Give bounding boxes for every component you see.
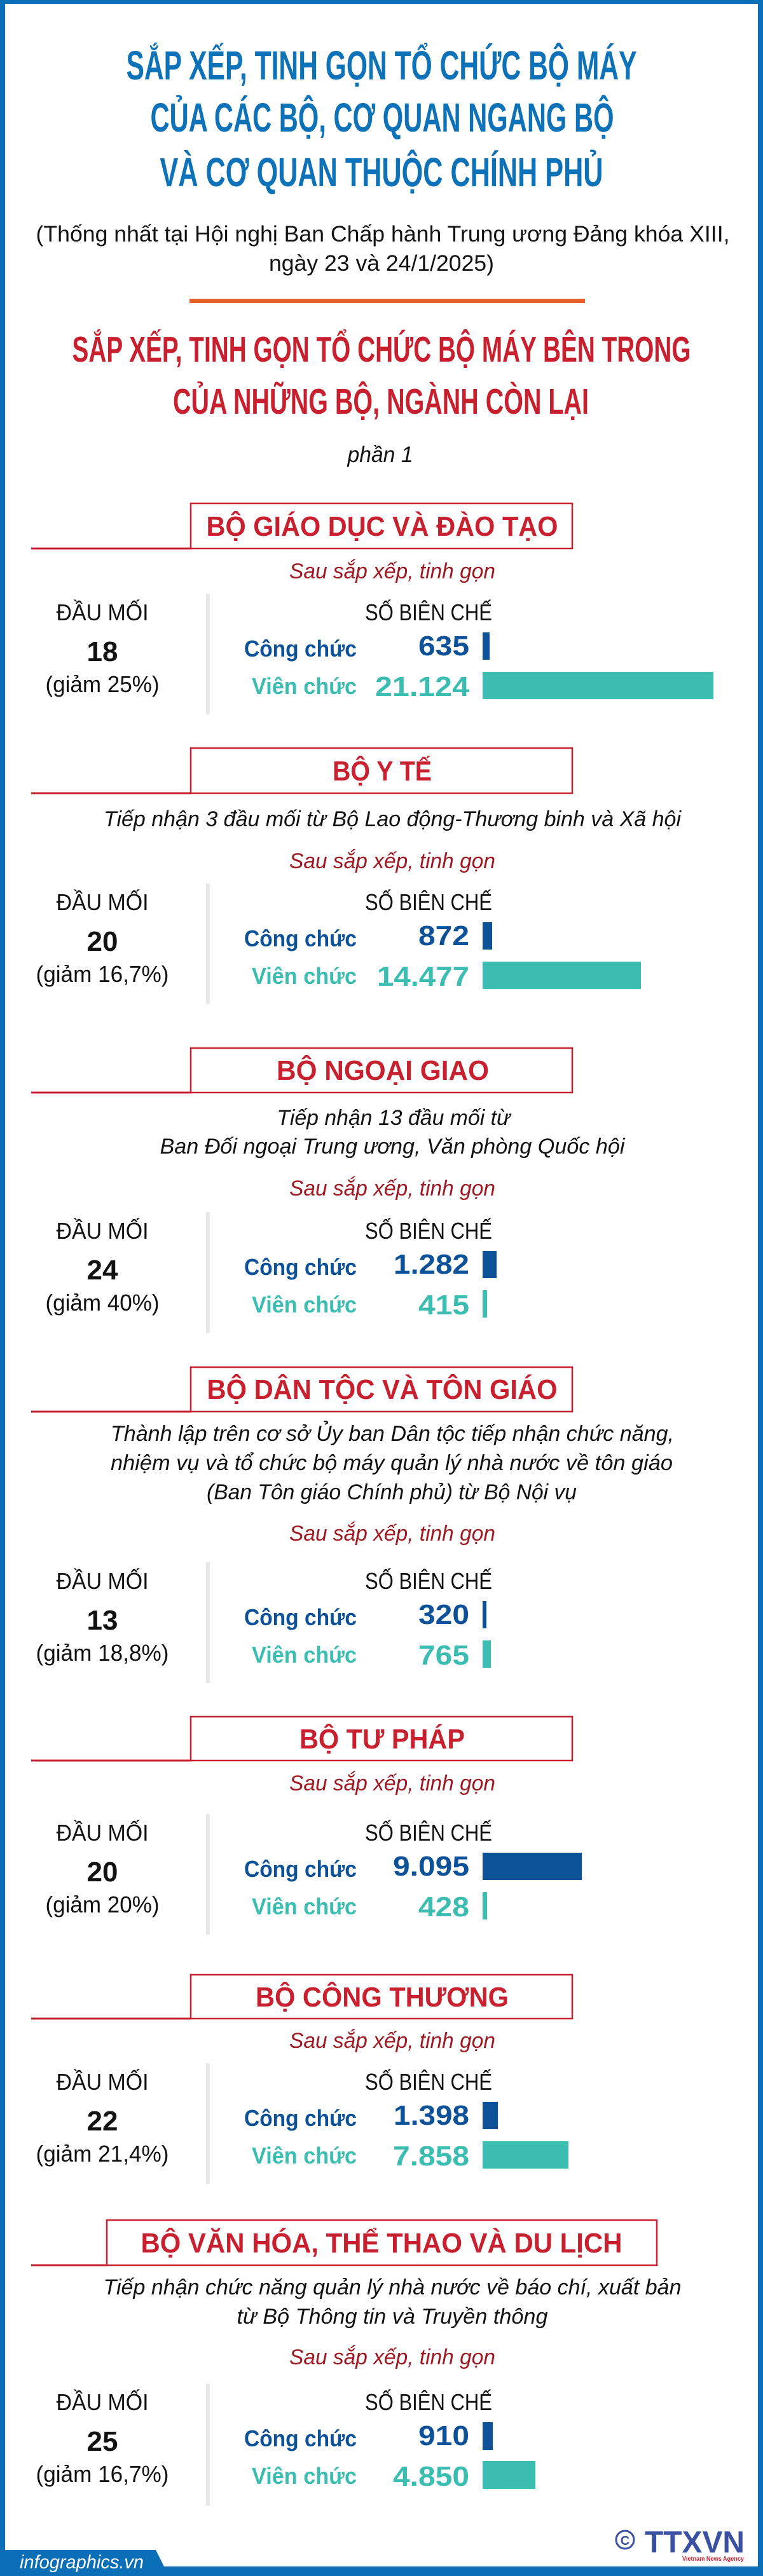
heading box: BỘ CÔNG THƯƠNG xyxy=(256,1980,509,2013)
red section title xyxy=(72,329,691,422)
đầu mối: (giảm 16,7%) xyxy=(36,2461,169,2487)
panel: Bộ Ngoại giao xyxy=(31,1048,626,1333)
bar chart: biên chế: 21.124 xyxy=(375,671,470,702)
bar chart: biên chế: Viên chức xyxy=(252,1291,357,1318)
panel: Bộ Công Thương: Sau sắp xếp, tinh gọn xyxy=(289,2029,495,2053)
đầu mối: ĐẦU MỐI xyxy=(56,1567,149,1594)
panel: Bộ Ngoại giao: Sau sắp xếp, tinh gọn xyxy=(289,1176,495,1201)
bar chart: biên chế: Viên chức xyxy=(252,963,357,989)
bar chart: biên chế: 4.850 xyxy=(393,2461,469,2492)
đầu mối: (giảm 25%) xyxy=(46,671,159,697)
bar chart: biên chế: Viên chức xyxy=(252,2463,357,2489)
bar chart: biên chế: SỐ BIÊN CHẾ xyxy=(365,1567,492,1594)
heading box: BỘ DÂN TỘC VÀ TÔN GIÁO xyxy=(207,1373,557,1405)
bar chart: biên chế: 1.282 xyxy=(394,1249,469,1280)
đầu mối xyxy=(36,1567,169,1666)
đầu mối: (giảm 40%) xyxy=(46,1290,159,1316)
bar chart: biên chế: 428 xyxy=(418,1891,469,1923)
main title xyxy=(126,42,637,195)
bar chart: biên chế: 872 xyxy=(418,920,469,951)
footer band xyxy=(0,2550,763,2576)
panel: Bộ Văn hóa, Thể thao và Du lịch xyxy=(31,2220,682,2505)
bar chart: biên chế: SỐ BIÊN CHẾ xyxy=(365,2389,492,2415)
bar chart: biên chế: Công chức xyxy=(244,1604,357,1630)
panel: Bộ Văn hóa, Thể thao và Du lịch: Sau sắp xếp, tinh gọn xyxy=(289,2345,495,2369)
panel: Bộ Y tế xyxy=(31,748,682,1004)
bar chart: biên chế xyxy=(244,599,713,702)
icon: TTXVN logo: C xyxy=(621,2534,629,2548)
heading box xyxy=(31,1975,572,2020)
panel: Bộ Văn hóa, Thể thao và Du lịch: Tiếp nhận chức năng quản lý nhà nước về báo chí, xuất bản xyxy=(103,2275,682,2300)
panel: Bộ Tư pháp xyxy=(31,1717,582,1935)
đầu mối: 22 xyxy=(87,2106,118,2137)
đầu mối xyxy=(46,1217,159,1316)
đầu mối: ĐẦU MỐI xyxy=(56,889,149,915)
bar chart: biên chế: 765 xyxy=(418,1640,469,1671)
subtitle xyxy=(36,222,730,276)
panel: Bộ Dân tộc và Tôn giáo: (Ban Tôn giáo Chính phủ) từ Bộ Nội vụ xyxy=(207,1480,577,1504)
bar chart: biên chế: Công chức xyxy=(244,2425,357,2451)
bar chart: biên chế: Công chức xyxy=(244,1254,357,1280)
panel: Bộ Văn hóa, Thể thao và Du lịch: từ Bộ Thông tin và Truyền thông xyxy=(237,2305,548,2329)
bar chart: biên chế: 9.095 xyxy=(393,1851,469,1882)
icon: TTXVN logo: Vietnam News Agency xyxy=(682,2556,744,2563)
bar chart: biên chế: Viên chức xyxy=(252,2143,357,2169)
part label: phần 1 xyxy=(347,442,413,467)
đầu mối xyxy=(36,2068,169,2167)
bar chart: biên chế: SỐ BIÊN CHẾ xyxy=(365,1217,492,1244)
panel: Bộ Dân tộc và Tôn giáo: Thành lập trên cơ sở Ủy ban Dân tộc tiếp nhận chức năng, xyxy=(111,1421,674,1446)
heading box xyxy=(31,503,572,549)
bar chart: biên chế: 1.398 xyxy=(394,2100,469,2131)
subtitle: (Thống nhất tại Hội nghị Ban Chấp hành Trung ương Đảng khóa XIII, xyxy=(36,222,730,247)
panel: Bộ Y tế: Tiếp nhận 3 đầu mối từ Bộ Lao động-Thương binh và Xã hội xyxy=(104,807,682,831)
heading box: BỘ Y TẾ xyxy=(333,754,432,787)
panel: Bộ Dân tộc và Tôn giáo: nhiệm vụ và tổ chức bộ máy quản lý nhà nước về tôn giáo xyxy=(111,1451,673,1475)
panel: Bộ Y tế: Sau sắp xếp, tinh gọn xyxy=(289,849,495,873)
subtitle: ngày 23 và 24/1/2025) xyxy=(269,251,494,276)
đầu mối: ĐẦU MỐI xyxy=(56,1217,149,1244)
đầu mối: ĐẦU MỐI xyxy=(56,599,149,625)
panel: Bộ Giáo dục và Đào tạo xyxy=(31,503,713,714)
bar chart: biên chế: 320 xyxy=(418,1599,469,1630)
bar chart: biên chế xyxy=(244,889,641,992)
bar chart: biên chế: 635 xyxy=(418,630,469,662)
bar chart: biên chế: 7.858 xyxy=(393,2141,469,2172)
bar chart: biên chế xyxy=(244,2389,535,2492)
bar chart: biên chế: Công chức xyxy=(244,1856,357,1882)
heading box xyxy=(31,748,572,794)
bar chart: biên chế: Công chức xyxy=(244,636,357,662)
panel: Bộ Ngoại giao: Ban Đối ngoại Trung ương, Văn phòng Quốc hội xyxy=(160,1135,626,1159)
heading box: BỘ NGOẠI GIAO xyxy=(277,1054,489,1086)
bar chart: biên chế xyxy=(244,1217,497,1321)
đầu mối: 20 xyxy=(87,926,118,957)
đầu mối: 25 xyxy=(87,2426,118,2457)
đầu mối: 13 xyxy=(87,1605,118,1636)
heading box xyxy=(31,1717,572,1762)
panel: Bộ Ngoại giao: Tiếp nhận 13 đầu mối từ xyxy=(277,1106,512,1130)
bar chart: biên chế: SỐ BIÊN CHẾ xyxy=(365,2068,492,2095)
đầu mối xyxy=(36,2389,169,2487)
bar chart: biên chế: 415 xyxy=(418,1290,469,1321)
bar chart: biên chế xyxy=(244,1819,582,1923)
panel: Bộ Tư pháp: Sau sắp xếp, tinh gọn xyxy=(289,1771,495,1796)
bar chart: biên chế: Công chức xyxy=(244,2105,357,2131)
bar chart: biên chế: Công chức xyxy=(244,925,357,951)
đầu mối xyxy=(36,889,169,987)
heading box xyxy=(31,2220,657,2266)
footer band: infographics.vn xyxy=(20,2552,144,2573)
heading box: BỘ TƯ PHÁP xyxy=(299,1722,465,1755)
heading box xyxy=(31,1048,572,1093)
panel: Bộ Công Thương xyxy=(31,1975,572,2184)
heading box: BỘ GIÁO DỤC VÀ ĐÀO TẠO xyxy=(206,510,558,542)
đầu mối: 20 xyxy=(87,1857,118,1888)
heading box: BỘ VĂN HÓA, THỂ THAO VÀ DU LỊCH xyxy=(141,2226,622,2259)
panel: Bộ Dân tộc và Tôn giáo xyxy=(31,1367,674,1683)
đầu mối: 18 xyxy=(87,636,118,667)
icon: TTXVN logo: TTXVN xyxy=(645,2526,745,2559)
bar chart: biên chế: SỐ BIÊN CHẾ xyxy=(365,599,492,625)
đầu mối xyxy=(46,1819,159,1918)
bar chart: biên chế: 910 xyxy=(418,2420,469,2451)
panel: Bộ Giáo dục và Đào tạo: Sau sắp xếp, tinh gọn xyxy=(289,559,495,583)
đầu mối: (giảm 21,4%) xyxy=(36,2141,169,2167)
bar chart: biên chế: 14.477 xyxy=(377,961,469,992)
đầu mối xyxy=(46,599,159,697)
đầu mối: ĐẦU MỐI xyxy=(56,2068,149,2095)
red section title: CỦA NHỮNG BỘ, NGÀNH CÒN LẠI xyxy=(173,381,589,422)
bar chart: biên chế xyxy=(244,1567,492,1671)
đầu mối: ĐẦU MỐI xyxy=(56,2389,149,2415)
đầu mối: (giảm 18,8%) xyxy=(36,1640,169,1666)
bar chart: biên chế: Viên chức xyxy=(252,673,357,699)
bar chart: biên chế: Viên chức xyxy=(252,1642,357,1668)
đầu mối: (giảm 16,7%) xyxy=(36,961,169,987)
đầu mối: ĐẦU MỐI xyxy=(56,1819,149,1846)
đầu mối: (giảm 20%) xyxy=(46,1891,159,1918)
bar chart: biên chế: SỐ BIÊN CHẾ xyxy=(365,1819,492,1846)
đầu mối: 24 xyxy=(87,1255,118,1286)
panel: Bộ Dân tộc và Tôn giáo: Sau sắp xếp, tinh gọn xyxy=(289,1522,495,1546)
bar chart: biên chế xyxy=(244,2068,568,2172)
bar chart: biên chế: Viên chức xyxy=(252,1893,357,1919)
heading box xyxy=(31,1367,572,1412)
bar chart: biên chế: SỐ BIÊN CHẾ xyxy=(365,889,492,915)
